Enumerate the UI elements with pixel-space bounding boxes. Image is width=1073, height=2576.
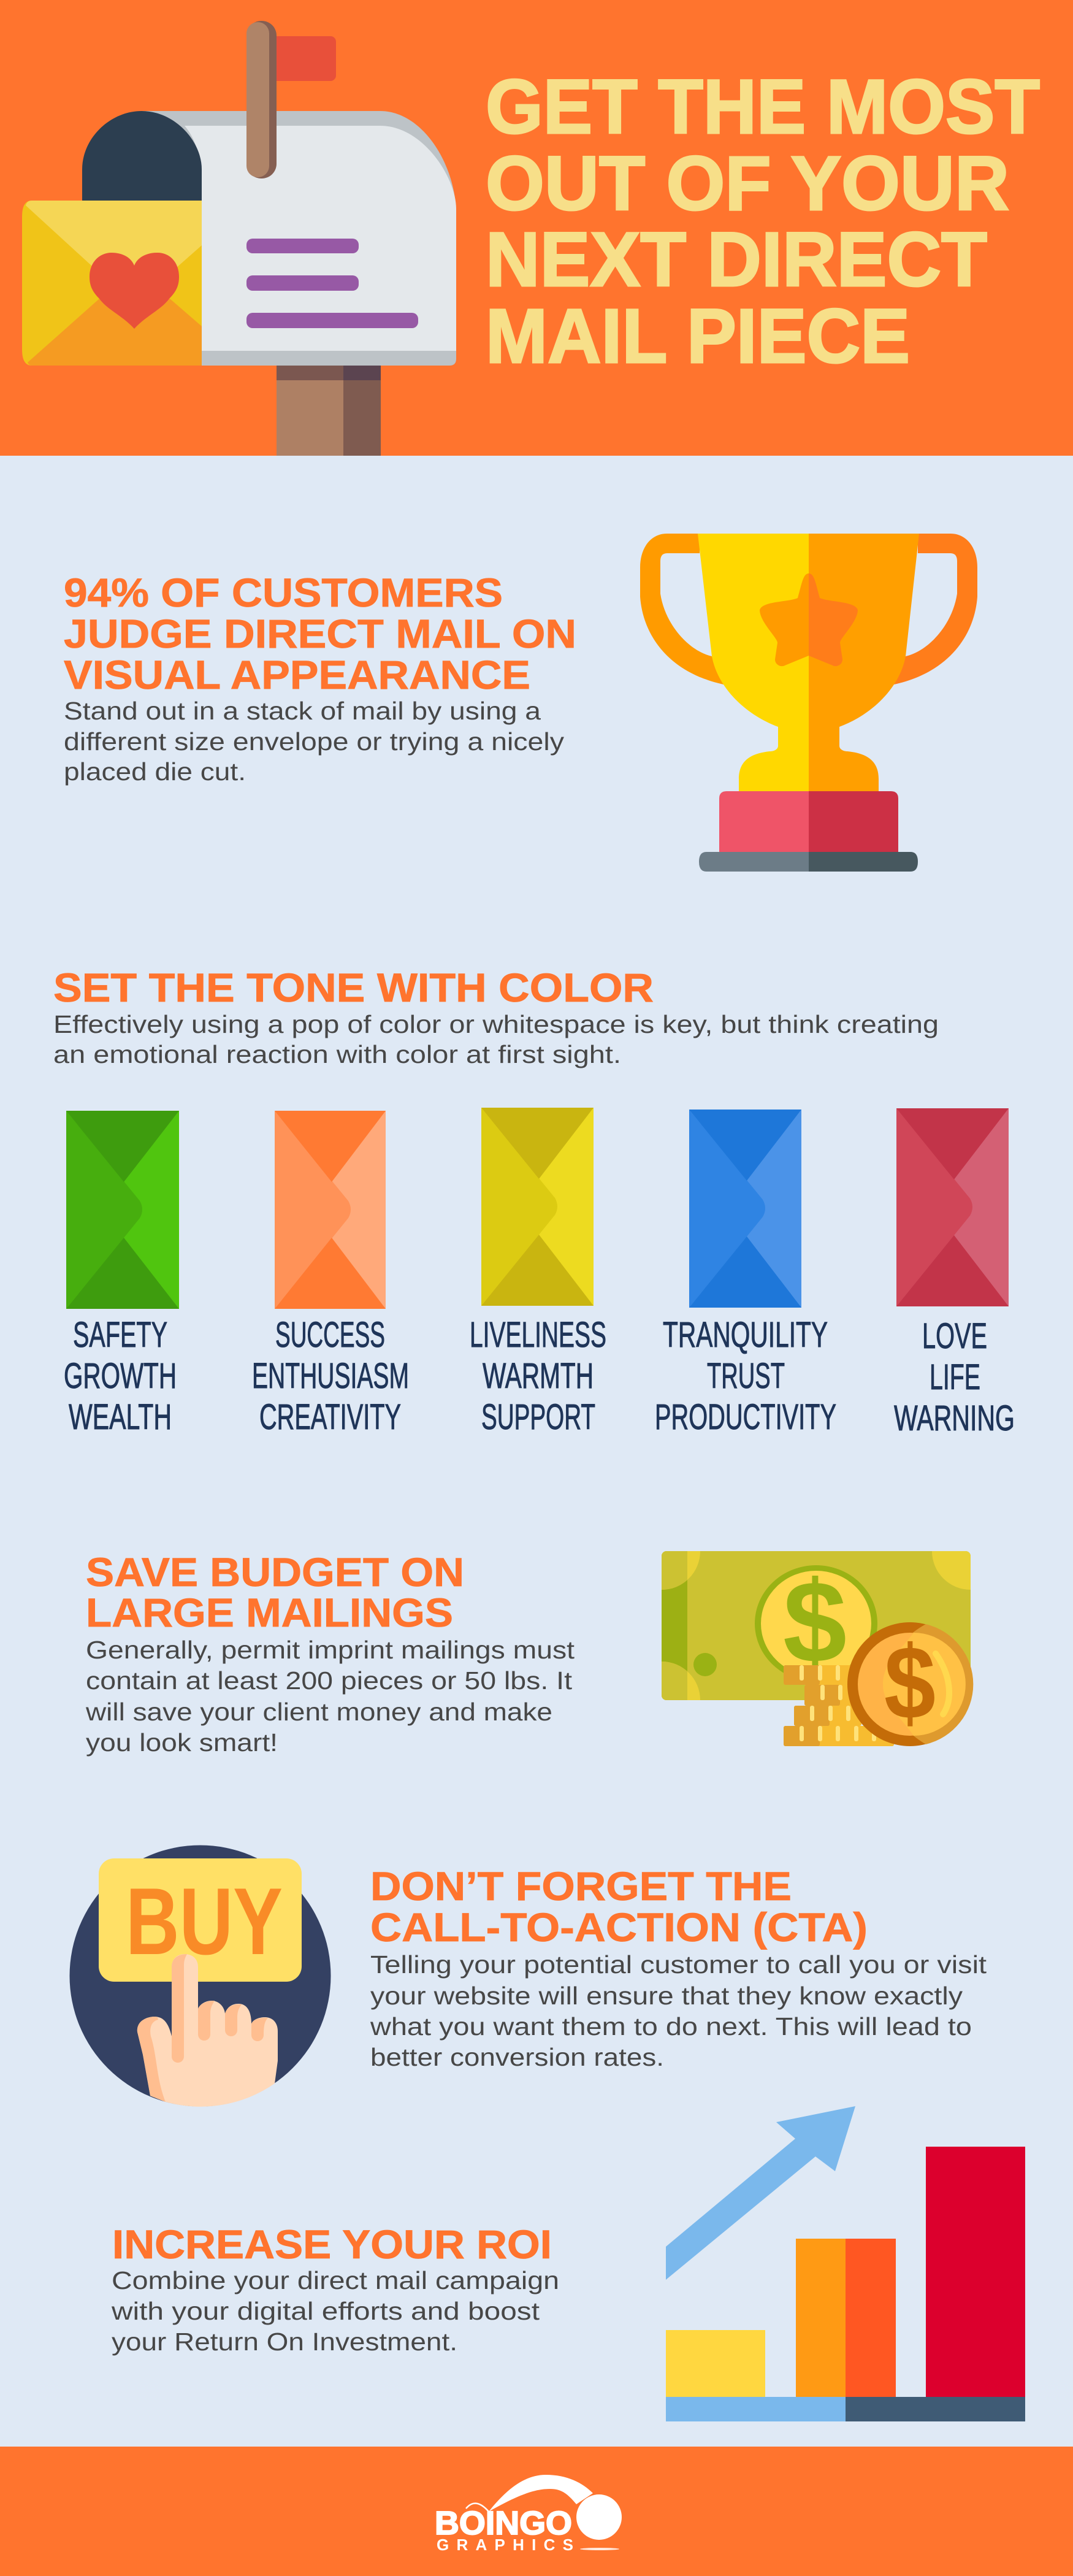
text block: call to action: better conversion rates. <box>370 2043 664 2071</box>
title: MAIL PIECE <box>486 294 910 379</box>
icon: banknote and coins <box>662 1551 974 1746</box>
icon: orange envelope <box>275 1111 386 1309</box>
labels: green: SAFETY <box>73 1315 167 1355</box>
chart: rising bars with arrow <box>666 2106 1025 2421</box>
text block: increase roi <box>111 2266 559 2356</box>
heading: call to action <box>370 1863 868 1950</box>
labels: orange: ENTHUSIASM <box>252 1356 409 1396</box>
labels: yellow: SUPPORT <box>481 1397 595 1437</box>
icon: buy button with hand: BUY <box>126 1868 283 1974</box>
logo: Boingo Graphics: BOINGO <box>435 2505 572 2542</box>
icon: blue envelope <box>689 1110 801 1308</box>
labels: green: GROWTH <box>64 1356 177 1396</box>
text block: call to action: Telling your potential customer to call you or visit <box>370 1950 987 1979</box>
title <box>486 64 1040 379</box>
labels: blue <box>655 1315 836 1437</box>
text block: increase roi: Combine your direct mail campaign <box>112 2266 559 2294</box>
panel: footer <box>0 2447 1073 2576</box>
panel: header <box>0 0 1073 456</box>
text block: save budget: contain at least 200 pieces or 50 lbs. It <box>86 1666 573 1695</box>
labels: green: WEALTH <box>69 1397 172 1437</box>
labels: blue: PRODUCTIVITY <box>655 1397 836 1437</box>
icon: mailbox with envelope <box>22 21 456 456</box>
labels: blue: TRANQUILITY <box>663 1315 828 1355</box>
panel: visual appearance <box>64 534 977 872</box>
heading: save budget: LARGE MAILINGS <box>86 1590 453 1635</box>
panel: set the tone with color <box>53 965 1015 1438</box>
text block: increase roi: your Return On Investment. <box>112 2328 457 2356</box>
text block: visual appearance <box>64 697 565 786</box>
text block: increase roi: with your digital efforts and boost <box>111 2297 540 2325</box>
labels: yellow: LIVELINESS <box>470 1315 606 1355</box>
heading: 94 percent: VISUAL APPEARANCE <box>64 652 530 697</box>
heading: call to action: CALL-TO-ACTION (CTA) <box>370 1904 868 1950</box>
text block: call to action: your website will ensure that they know exactly <box>370 1982 963 2010</box>
logo: Boingo Graphics: GRAPHICS <box>437 2536 573 2554</box>
panel: increase roi <box>111 2106 1025 2421</box>
title: OUT OF YOUR <box>486 141 1009 226</box>
text block: visual appearance: placed die cut. <box>64 757 246 786</box>
icon: red envelope <box>896 1108 1009 1306</box>
title: NEXT DIRECT <box>486 217 987 302</box>
panel: call to action <box>70 1845 987 2107</box>
logo: Boingo Graphics <box>435 2475 622 2554</box>
text block: call to action: what you want them to do next. This will lead to <box>370 2012 972 2041</box>
heading: save budget: SAVE BUDGET ON <box>86 1549 464 1595</box>
labels: orange: CREATIVITY <box>259 1397 401 1437</box>
title: GET THE MOST <box>486 64 1040 150</box>
icon: banknote and coins: $ <box>783 1557 847 1687</box>
labels: yellow <box>470 1315 606 1437</box>
icon: yellow envelope <box>481 1108 594 1306</box>
heading: increase roi: INCREASE YOUR ROI <box>112 2221 552 2267</box>
labels: red: LIFE <box>930 1357 980 1397</box>
text block: color intro: an emotional reaction with color at first sight. <box>53 1040 621 1068</box>
labels: orange <box>252 1315 409 1437</box>
text block: save budget: you look smart! <box>86 1728 278 1757</box>
heading: call to action: DON’T FORGET THE <box>370 1863 792 1909</box>
heading: 94 percent <box>64 570 576 697</box>
text block: call to action <box>370 1950 987 2071</box>
labels: red: LOVE <box>922 1316 987 1356</box>
heading: 94 percent: JUDGE DIRECT MAIL ON <box>64 611 576 656</box>
labels: orange: SUCCESS <box>275 1315 385 1355</box>
text block: visual appearance: Stand out in a stack of mail by using a <box>64 697 541 725</box>
heading: set the tone: SET THE TONE WITH COLOR <box>53 965 654 1010</box>
text block: save budget <box>85 1636 575 1757</box>
labels: blue: TRUST <box>707 1356 785 1396</box>
text block: save budget: Generally, permit imprint mailings must <box>86 1636 575 1664</box>
heading: 94 percent: 94% OF CUSTOMERS <box>64 570 503 615</box>
text block: color intro <box>53 1010 939 1068</box>
text block: color intro: Effectively using a pop of color or whitespace is key, but think creating <box>53 1010 939 1038</box>
labels: red: WARNING <box>894 1398 1015 1438</box>
icon: buy button with hand <box>70 1845 331 2107</box>
icon: trophy <box>640 534 977 872</box>
heading: save budget <box>86 1549 464 1635</box>
panel: save budget <box>86 1551 974 1757</box>
icon: banknote and coins: $ <box>884 1625 936 1741</box>
labels: red <box>894 1316 1015 1438</box>
text block: visual appearance: different size envelope or trying a nicely <box>64 727 565 756</box>
labels: yellow: WARMTH <box>483 1356 594 1396</box>
icon: green envelope <box>66 1111 179 1309</box>
labels: green <box>64 1315 177 1437</box>
text block: save budget: will save your client money and make <box>85 1698 552 1726</box>
